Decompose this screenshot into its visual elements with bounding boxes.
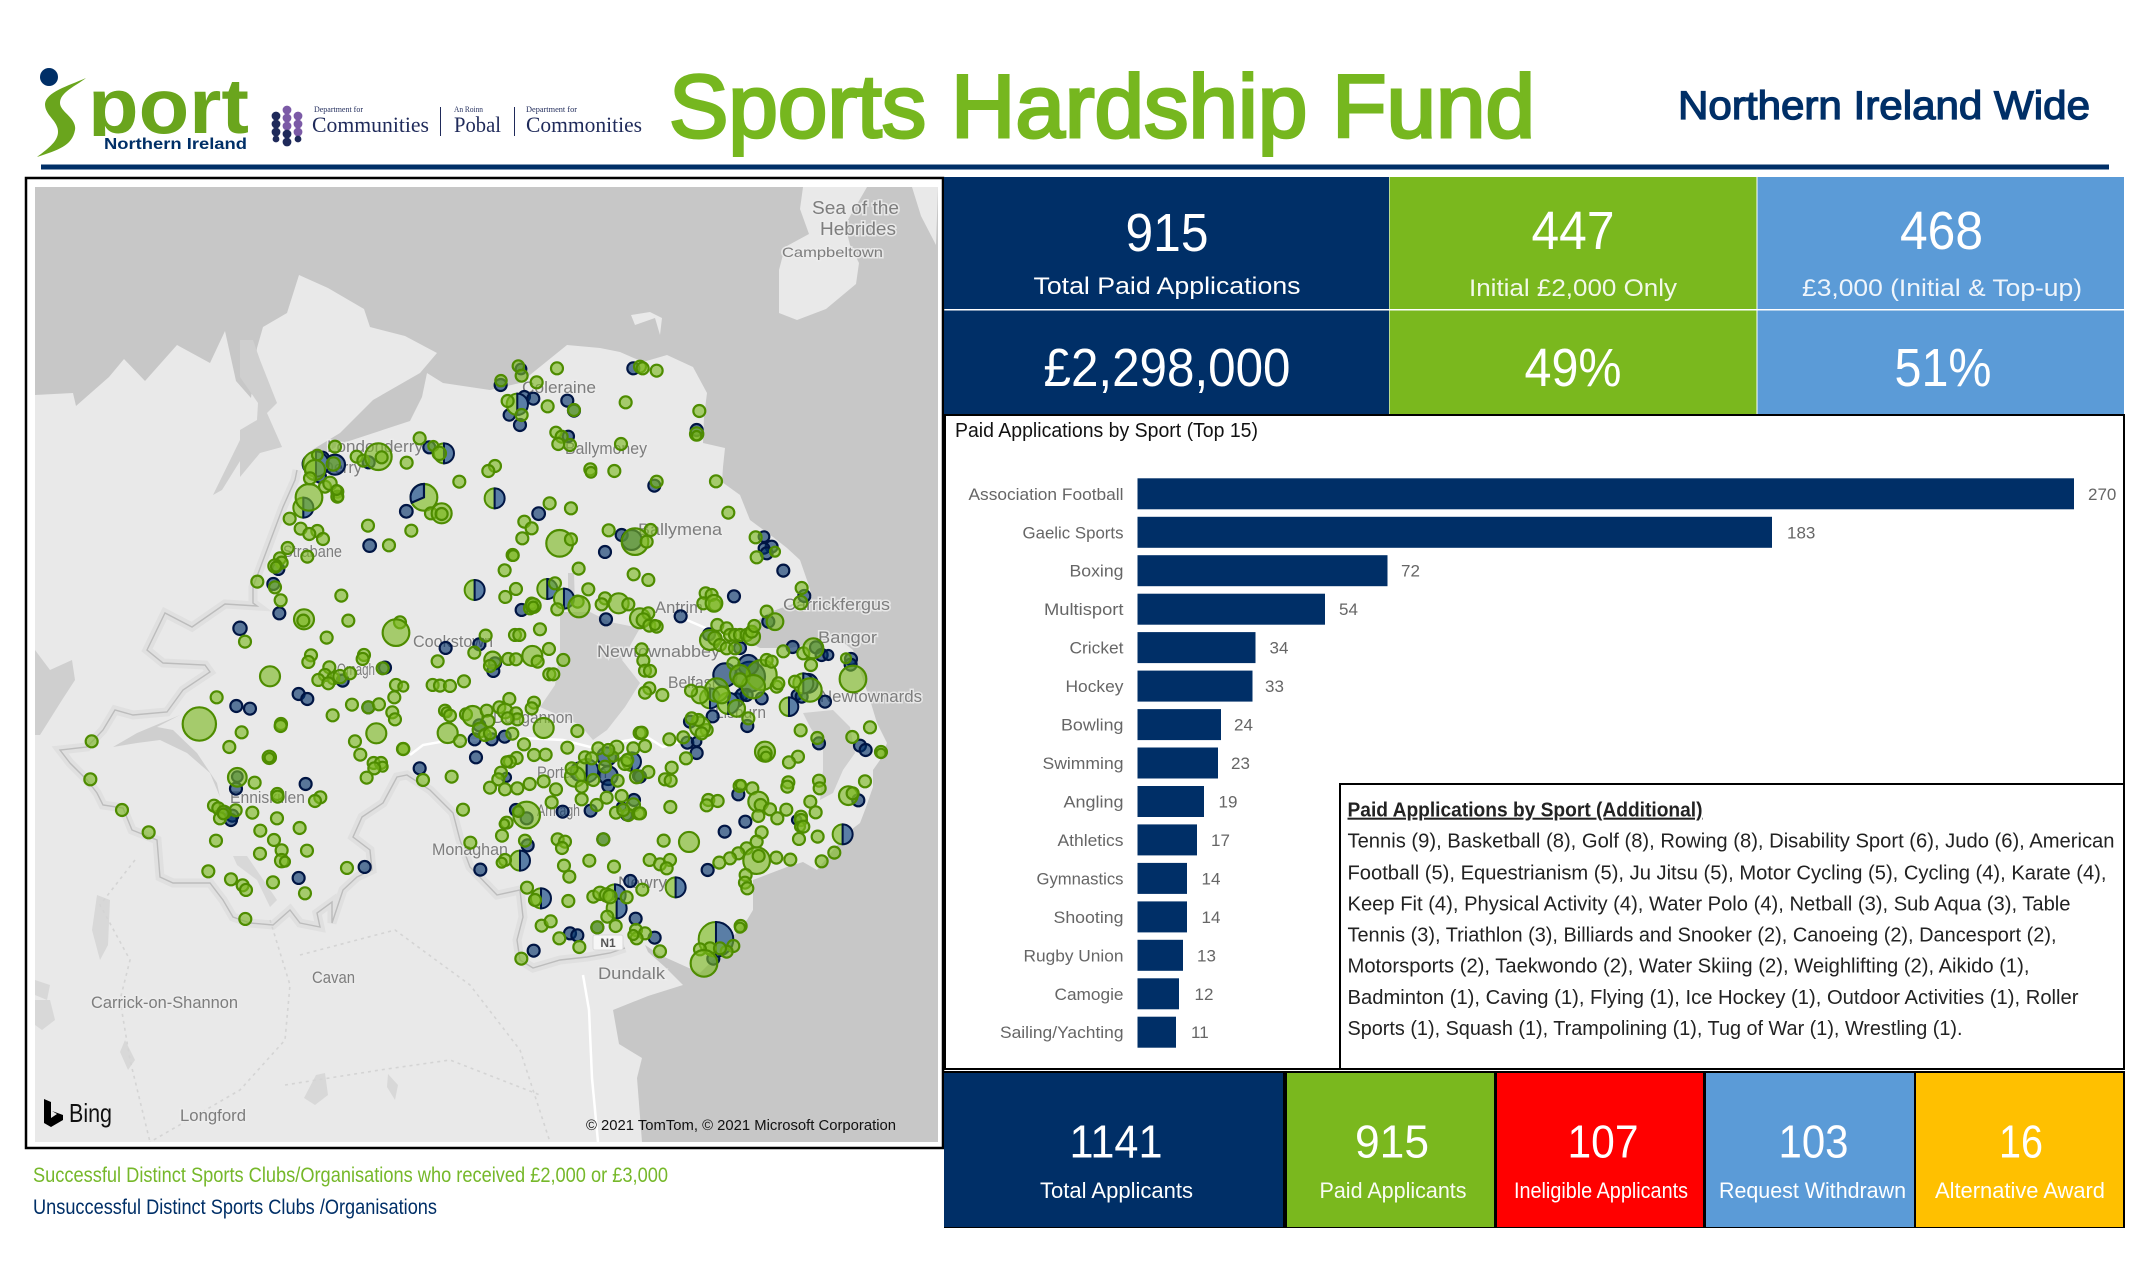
tile: total applicants: Total Applicants — [1040, 1178, 1193, 1203]
successful markers — [84, 360, 887, 977]
category labels: Shooting — [1054, 908, 1124, 927]
additional list: Badminton (1), Caving (1), Flying (1), Ice Hockey (1), Outdoor Activities (1), Roller — [1348, 987, 2079, 1009]
logo: Sport Northern Ireland: Northern Ireland — [104, 136, 247, 153]
unsuccessful markers — [218, 362, 872, 965]
tile: ineligible applicants: Ineligible Applicants — [1514, 1178, 1688, 1203]
logo: Department for Communities — [272, 105, 642, 146]
additional heading: Paid Applications by Sport (Additional) — [1348, 800, 1702, 822]
place labels: Ballymena — [638, 520, 723, 539]
map legend: Successful Distinct Sports Clubs/Organisations who received £2,000 or £3,000 — [33, 1164, 668, 1187]
logo: Bing — [44, 1098, 112, 1128]
place labels: Londonderry — [327, 437, 423, 456]
southern lakes — [35, 856, 398, 1105]
water — [35, 187, 938, 1142]
place labels: Belfast — [668, 673, 716, 692]
value labels: 34 — [1270, 639, 1288, 658]
place labels: Monaghan — [432, 840, 508, 859]
tile: paid applicants: Paid Applicants — [1320, 1178, 1466, 1203]
place labels: Portadown — [537, 763, 607, 782]
place labels: Newry — [618, 873, 668, 892]
category labels: Boxing — [1070, 562, 1124, 581]
logo: Sport Northern Ireland: port — [88, 62, 249, 150]
logo: Sport Northern Ireland — [37, 62, 249, 157]
value labels: 12 — [1194, 985, 1213, 1004]
place labels — [91, 198, 922, 1125]
tile: initial and top-up — [1758, 177, 2124, 309]
tile: total applicants — [944, 1073, 1283, 1227]
place labels: Strabane — [283, 542, 342, 561]
value labels: 23 — [1231, 754, 1250, 773]
additional list: Keep Fit (4), Physical Activity (4), Water Polo (4), Netball (3), Sub Aqua (3), Table — [1348, 894, 2070, 916]
tile: alternative award: 16 — [1999, 1116, 2043, 1168]
value labels: 183 — [1787, 523, 1815, 542]
place labels: Antrim — [655, 598, 703, 617]
place labels: Armagh — [537, 801, 580, 820]
category labels: Angling — [1064, 792, 1124, 812]
value labels — [1191, 485, 2116, 1042]
tile: 49 percent: 49% — [1524, 338, 1622, 398]
logo: Department for Communities: Communities — [312, 112, 429, 137]
land: Ireland — [35, 275, 887, 1142]
place labels: Longford — [180, 1106, 246, 1125]
place labels: Derry — [322, 458, 362, 477]
category labels: Cricket — [1070, 639, 1124, 658]
additional list: Sports (1), Squash (1), Trampolining (1), Tug of War (1), Wrestling (1). — [1348, 1018, 1962, 1040]
additional list — [1348, 831, 2114, 1040]
category labels: Association Football — [968, 485, 1124, 504]
category labels: Rugby Union — [1024, 946, 1124, 965]
title: Sports Hardship Fund — [669, 56, 1535, 156]
value labels: 72 — [1401, 562, 1420, 581]
tile: request withdrawn: 103 — [1778, 1116, 1848, 1168]
road sign: N1 — [593, 935, 623, 950]
place labels: Sea of the — [812, 198, 899, 218]
category labels: Bowling — [1061, 716, 1124, 735]
bars — [1138, 478, 2074, 1048]
map legend — [33, 1164, 668, 1219]
tile: total amount — [944, 310, 1389, 415]
tile: request withdrawn: Request Withdrawn — [1719, 1178, 1906, 1203]
mixed-outcome pie markers — [293, 394, 853, 957]
chart title: Paid Applications by Sport (Top 15) — [955, 420, 1258, 442]
tile: request withdrawn — [1706, 1073, 1914, 1227]
place labels: Cavan — [312, 968, 355, 987]
place labels: Carrickfergus — [783, 595, 890, 614]
place labels: Coleraine — [522, 378, 596, 397]
tile: ineligible applicants — [1497, 1073, 1703, 1227]
additional list: Motorsports (2), Taekwondo (2), Water Skiing (2), Weighlifting (2), Aikido (1), — [1348, 956, 2030, 978]
place labels: Bangor — [818, 628, 877, 647]
place labels: Lisburn — [715, 703, 766, 722]
tile: initial and top-up: 468 — [1900, 201, 1983, 261]
tile: total paid applications — [944, 177, 1389, 309]
category labels: Hockey — [1066, 677, 1124, 696]
border — [60, 470, 745, 1142]
category labels: Multisport — [1044, 600, 1124, 619]
value labels: 54 — [1339, 600, 1358, 619]
tile: 49 percent — [1390, 310, 1756, 415]
tile: paid applicants — [1287, 1073, 1494, 1227]
road sign: N1: N1 — [600, 936, 616, 950]
tile: total applicants: 1141 — [1070, 1116, 1162, 1168]
logo: Department for Communities: Pobal — [454, 112, 501, 137]
logo: Department for Communities: Department for — [526, 105, 577, 114]
value labels: 17 — [1211, 831, 1230, 850]
panel: bar chart — [945, 415, 2124, 1069]
place labels: Hebrides — [820, 219, 896, 239]
tile: 51 percent: 51% — [1894, 338, 1992, 398]
category labels: Sailing/Yachting — [1000, 1023, 1124, 1042]
place labels: Campbeltown — [782, 244, 883, 260]
place labels: Omagh — [337, 660, 375, 679]
logo: Bing: Bing — [69, 1098, 112, 1128]
tile: total paid applications: 915 — [1126, 203, 1208, 263]
category labels: Camogie — [1054, 985, 1124, 1004]
logo: Department for Communities: Department for — [314, 105, 363, 114]
header rule — [41, 164, 2109, 170]
logo: Department for Communities: An Roinn — [454, 105, 483, 114]
value labels: 14 — [1202, 908, 1220, 927]
category labels: Gaelic Sports — [1022, 523, 1124, 542]
tile: initial only: Initial £2,000 Only — [1469, 275, 1677, 302]
value labels: 33 — [1265, 677, 1284, 696]
category labels: Gymnastics — [1036, 869, 1124, 888]
additional list: Tennis (3), Triathlon (3), Billiards and Snooker (2), Canoeing (2), Dancesport (2), — [1348, 924, 2056, 946]
place labels: Newtownabbey — [597, 642, 721, 661]
tile: paid applicants: 915 — [1355, 1116, 1429, 1168]
panel: bottom stat tiles — [944, 1071, 2125, 1228]
additional list: Football (5), Equestrianism (5), Ju Jitsu (5), Motor Cycling (5), Cycling (4), Karate (4), — [1348, 862, 2106, 884]
tile: initial only — [1390, 177, 1756, 309]
place labels: Dundalk — [598, 964, 666, 983]
value labels: 14 — [1202, 869, 1220, 888]
category labels: Swimming — [1042, 754, 1124, 773]
tile: ineligible applicants: 107 — [1568, 1116, 1638, 1168]
panel: additional sports — [1340, 784, 2124, 1069]
additional list: Tennis (9), Basketball (8), Golf (8), Rowing (8), Disability Sport (6), Judo (6), American — [1348, 831, 2114, 853]
tile: alternative award: Alternative Award — [1935, 1178, 2105, 1203]
land: Scotland — [631, 187, 938, 335]
panel: top stat tiles — [944, 177, 2124, 415]
category labels: Athletics — [1058, 831, 1124, 850]
tile: initial and top-up: £3,000 (Initial & Top-up) — [1802, 275, 2082, 302]
place labels: Dungannon — [493, 708, 573, 727]
tile: alternative award — [1916, 1073, 2123, 1227]
header — [37, 68, 2109, 170]
logo: Department for Communities: Commonities — [526, 112, 642, 137]
place labels: Cookstown — [413, 632, 493, 651]
map copyright: © 2021 TomTom, © 2021 Microsoft Corporation — [586, 1117, 896, 1134]
panel: map — [26, 178, 943, 1148]
map legend: Unsuccessful Distinct Sports Clubs /Organisations — [33, 1196, 437, 1219]
tile: 51 percent — [1758, 310, 2124, 415]
tile: total paid applications: Total Paid Applications — [1034, 273, 1300, 300]
value labels: 24 — [1234, 716, 1253, 735]
subtitle: Northern Ireland Wide — [1678, 84, 2090, 128]
tile: initial only: 447 — [1532, 201, 1614, 261]
place labels: Ballymoney — [565, 439, 647, 458]
tile: total amount: £2,298,000 — [1044, 338, 1290, 398]
inland water — [35, 340, 855, 800]
place labels: Newtownards — [820, 687, 922, 706]
place labels: Carrick-on-Shannon — [91, 993, 238, 1012]
value labels: 19 — [1218, 792, 1237, 812]
category labels — [968, 485, 1124, 1042]
value labels: 11 — [1191, 1023, 1209, 1042]
value labels: 270 — [2088, 485, 2116, 504]
value labels: 13 — [1197, 946, 1216, 965]
place labels: Enniskillen — [230, 788, 305, 807]
